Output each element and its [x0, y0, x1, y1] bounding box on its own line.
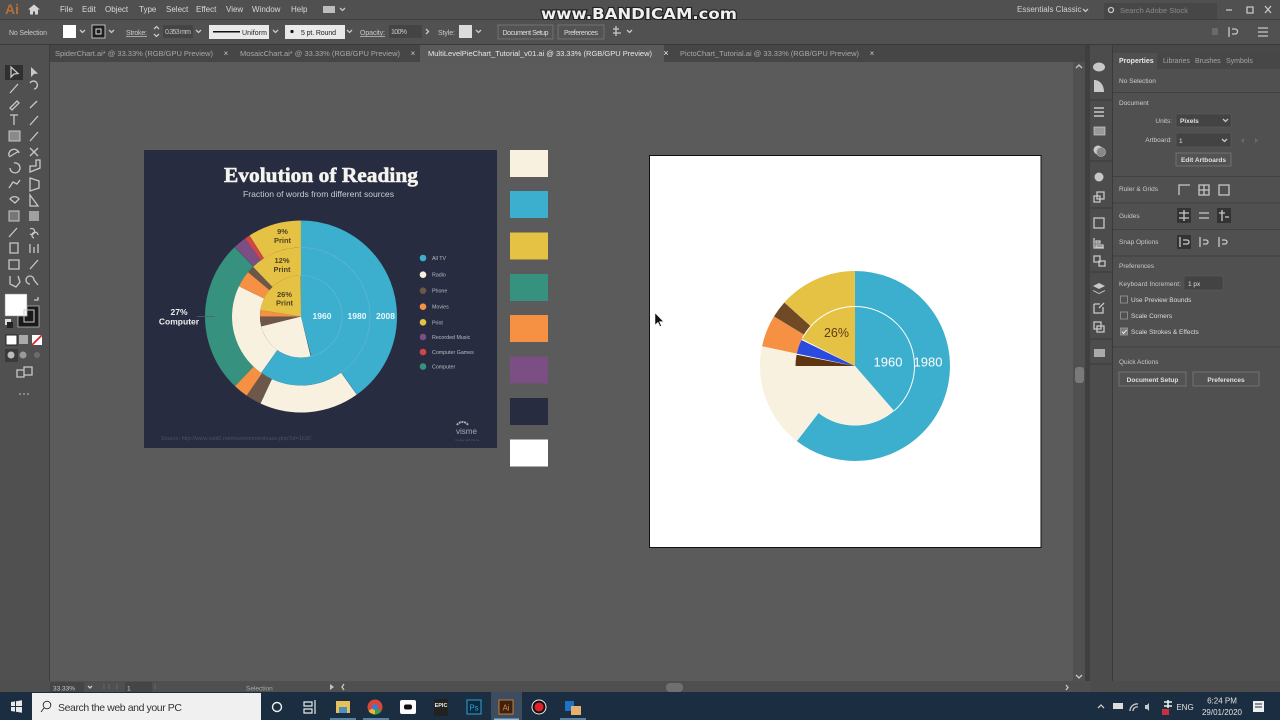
reference source note: Source: http://www.calit2.net/newsroom/release.php?id=1630: [161, 436, 311, 442]
taskbar app icons: Ai: [502, 704, 510, 712]
properties panel: Scale Corners: [1131, 313, 1173, 320]
properties panel: Document: [1119, 100, 1149, 107]
reference legend: Movies: [432, 305, 449, 311]
visme logo: visme: [456, 427, 477, 436]
document tabs: ×: [870, 49, 875, 58]
system tray: 29/01/2020: [1202, 708, 1243, 717]
status bar: [0, 681, 1280, 692]
reference chart labels: Computer: [159, 316, 200, 326]
pie chart labels: 26%: [824, 326, 849, 340]
properties panel: Use Preview Bounds: [1131, 297, 1192, 304]
working artboard: [650, 156, 1041, 548]
Windows taskbar: [0, 692, 1280, 720]
application menu bar: Window: [252, 5, 281, 14]
document tabs: ×: [224, 49, 229, 58]
control bar: 0.353 mm: [165, 29, 191, 36]
properties panel: 1 px: [1188, 281, 1201, 288]
pie chart labels: [824, 326, 942, 370]
application menu bar: Object: [105, 5, 129, 14]
reference chart labels: 27%: [170, 307, 188, 317]
document tabs: PictoChart_Tutorial.ai @ 33.33% (RGB/GPU Preview): [680, 49, 860, 58]
system tray: 6:24 PM: [1207, 696, 1237, 706]
reference chart labels: 1960: [313, 311, 332, 321]
reference subtitle: Fraction of words from different sources: [243, 189, 394, 199]
search box: [32, 693, 261, 720]
visme logo: [455, 422, 480, 442]
reference infographic artboard: [144, 150, 497, 448]
pie chart labels: 1960: [874, 354, 902, 370]
start button: [11, 700, 22, 713]
reference legend: Recorded Music: [432, 335, 471, 341]
visme logo: Create with Visme: [455, 438, 480, 442]
document tabs: ×: [411, 49, 416, 58]
status bar: 33.33%: [53, 686, 75, 692]
properties panel: Units:: [1155, 118, 1172, 125]
search box: Search the web and your PC: [58, 702, 182, 714]
document tabs: ×: [663, 48, 669, 58]
control bar: [0, 20, 1280, 45]
status bar: Selection: [246, 686, 273, 692]
document tabs: [0, 45, 1280, 62]
document tabs: SpiderChart.ai* @ 33.33% (RGB/GPU Preview): [55, 49, 214, 58]
application menu bar: Essentials Classic: [1017, 5, 1081, 14]
properties panel: Document Setup: [1127, 377, 1178, 384]
properties panel: Scale Strokes & Effects: [1131, 329, 1200, 336]
properties panel: Brushes: [1195, 58, 1221, 65]
reference legend: Radio: [432, 273, 446, 279]
pie chart in progress: [746, 257, 964, 475]
properties panel: No Selection: [1119, 78, 1156, 85]
right icon strip: [1090, 45, 1113, 692]
properties panel: Keyboard Increment:: [1119, 281, 1181, 288]
control bar: Document Setup: [502, 30, 549, 37]
properties panel: Preferences: [1207, 377, 1245, 384]
application menu bar: Effect: [196, 5, 217, 14]
properties panel: Guides: [1119, 213, 1140, 220]
application menu bar: [0, 0, 1280, 20]
control bar: Preferences: [564, 30, 598, 37]
document tabs: MosaicChart.ai* @ 33.33% (RGB/GPU Preview): [240, 49, 400, 58]
application menu bar: Type: [139, 5, 157, 14]
taskbar app icons: EPIC: [435, 703, 447, 709]
canvas background: [50, 62, 1073, 681]
properties panel: 1: [1179, 138, 1183, 145]
control bar: Uniform: [242, 30, 267, 37]
properties panel: Preferences: [1119, 263, 1155, 270]
control bar: 5 pt. Round: [301, 30, 336, 37]
properties panel: Quick Actions: [1119, 359, 1159, 366]
application menu bar: Edit: [82, 5, 97, 14]
properties panel: Symbols: [1226, 58, 1253, 65]
taskbar app icons: [272, 692, 586, 720]
left tools panel: [0, 45, 50, 681]
application menu bar: Select: [166, 5, 189, 14]
control bar: No Selection: [9, 30, 47, 37]
taskbar app icons: Ps: [469, 704, 479, 712]
reference chart labels: 26%: [277, 290, 292, 299]
status bar: 1: [127, 686, 131, 692]
control bar: Opacity:: [360, 30, 385, 37]
application menu bar: View: [226, 5, 243, 14]
properties panel: Edit Artboards: [1181, 157, 1226, 164]
properties panel: Ruler & Grids: [1119, 186, 1159, 193]
reference chart labels: Print: [273, 265, 291, 274]
application menu bar: Ai: [5, 1, 19, 17]
control bar: Stroke:: [126, 30, 147, 37]
reference chart labels: 1980: [348, 311, 367, 321]
system tray: [1098, 696, 1264, 717]
mouse cursor: [655, 313, 663, 326]
control bar: Style:: [438, 30, 455, 37]
colour swatches: [510, 150, 548, 466]
reference legend: Phone: [432, 289, 447, 295]
document tabs: MultiLevelPieChart_Tutorial_v01.ai @ 33.33% (RGB/GPU Preview): [428, 49, 652, 58]
reference chart labels: 12%: [274, 256, 290, 265]
properties panel: Snap Options: [1119, 239, 1159, 246]
properties panel: [1113, 45, 1280, 692]
reference chart labels: Print: [276, 298, 294, 308]
reference legend: [420, 255, 474, 370]
application menu bar: File: [60, 5, 73, 14]
watermark: www.BANDICAM.com: www.BANDICAM.com: [541, 5, 737, 23]
control bar: 100%: [391, 29, 407, 36]
reference legend: Computer: [432, 364, 455, 370]
reference title: Evolution of Reading: [224, 163, 419, 187]
reference chart labels: Print: [274, 236, 292, 245]
properties panel: Libraries: [1163, 58, 1190, 65]
application menu bar: Search Adobe Stock: [1120, 6, 1188, 15]
reference chart labels: 2008: [376, 311, 395, 321]
application menu bar: Help: [291, 5, 308, 14]
system tray: ENG: [1176, 703, 1194, 712]
vertical scrollbar: [1073, 45, 1090, 692]
pie chart labels: 1980: [914, 354, 942, 370]
reference chart labels: 9%: [277, 227, 288, 236]
reference legend: Computer Games: [432, 350, 474, 356]
reference legend: Print: [432, 320, 443, 326]
properties panel: Artboard:: [1145, 137, 1172, 144]
reference legend: All TV: [432, 256, 446, 262]
reference multi-level pie chart: [184, 200, 418, 433]
properties panel: Properties: [1119, 58, 1154, 65]
reference chart labels: [159, 227, 395, 326]
properties panel: Pixels: [1180, 118, 1199, 125]
